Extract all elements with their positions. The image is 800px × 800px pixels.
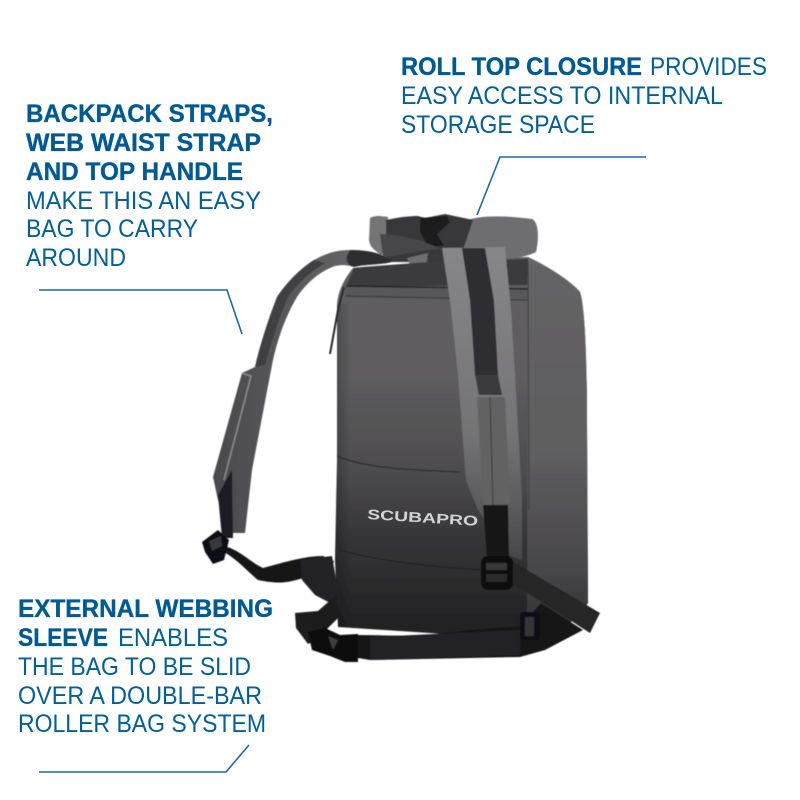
- roll top closure: [369, 214, 538, 270]
- text: backpack straps description: BAG TO CARRY: [26, 216, 198, 243]
- text: backpack straps description: MAKE THIS AN EASY: [26, 188, 261, 215]
- callout: roll top closure: PROVIDES: [650, 54, 767, 81]
- heading: backpack straps: WEB WAIST STRAP: [26, 130, 261, 157]
- lower pocket seam: [337, 456, 480, 570]
- leader line: straps: [39, 290, 242, 334]
- leader line: webbing sleeve: [39, 745, 249, 772]
- callout: backpack straps: [26, 101, 273, 272]
- heading: backpack straps: AND TOP HANDLE: [26, 159, 243, 186]
- shoulder strap: left: [213, 250, 392, 538]
- callout: roll top closure: EASY ACCESS TO INTERNAL: [401, 83, 723, 110]
- lower left strap buckle: [202, 530, 229, 564]
- waist strap with buckle: [308, 603, 583, 662]
- backpack illustration: [202, 214, 600, 662]
- logo: SCUBAPRO: SCUBAPRO: [367, 506, 479, 529]
- callout: external webbing sleeve: SLEEVE: [18, 625, 108, 652]
- heading: backpack straps: BACKPACK STRAPS,: [26, 101, 273, 128]
- callout: external webbing sleeve: THE BAG TO BE SLID: [18, 654, 251, 681]
- callout: external webbing sleeve: ENABLES: [118, 625, 228, 652]
- leader line: roll top: [477, 157, 646, 215]
- shoulder strap: front: [442, 247, 522, 560]
- callout: external webbing sleeve: ROLLER BAG SYSTEM: [18, 711, 266, 738]
- front strap webbing and buckle: [481, 505, 600, 633]
- callout: external webbing sleeve: [18, 596, 273, 738]
- soft body shading: [335, 290, 400, 630]
- callout: external webbing sleeve: OVER A DOUBLE-BAR: [18, 683, 262, 710]
- bag side panel: [527, 257, 588, 647]
- text: backpack straps description: [26, 188, 261, 272]
- text: backpack straps description: AROUND: [26, 245, 126, 272]
- callout: external webbing sleeve: EXTERNAL WEBBING: [18, 596, 273, 623]
- main bag body: [335, 257, 588, 647]
- waist strap loop: [295, 590, 342, 644]
- zipper pocket: [330, 262, 529, 510]
- callout: roll top closure: [401, 54, 767, 139]
- callout: roll top closure: STORAGE SPACE: [401, 112, 595, 139]
- callout: roll top closure: ROLL TOP CLOSURE: [401, 54, 642, 81]
- sternum strap: [224, 546, 338, 605]
- top dark band: [346, 259, 528, 287]
- heading: backpack straps: [26, 101, 273, 186]
